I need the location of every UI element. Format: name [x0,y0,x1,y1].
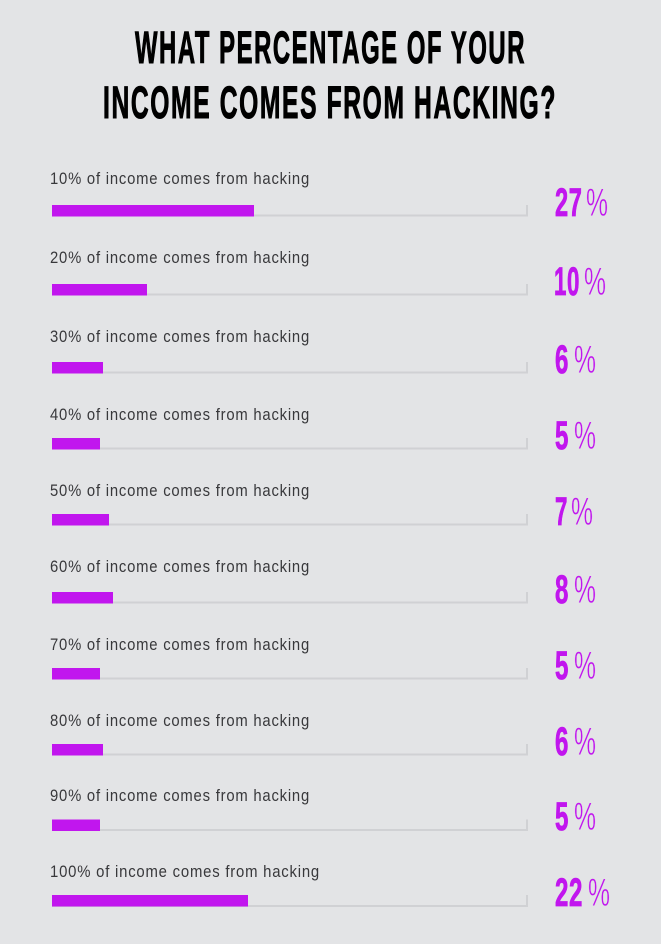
value: 6 [555,338,569,382]
value: % [571,491,593,534]
bar [52,205,528,216]
bar [52,895,528,907]
row: 80% [50,711,596,764]
value: 27 [555,181,582,225]
row: 50% [50,481,593,534]
bar [52,820,528,831]
bar [52,592,528,604]
label: 70% of income comes from hacking [50,635,310,654]
value: % [584,261,606,304]
value [555,644,596,688]
bar [52,514,528,526]
row: 100% [50,862,610,915]
value: % [574,569,596,612]
value: % [588,872,610,915]
label: 100% of income comes from hacking [50,862,320,881]
value: % [574,339,596,382]
row: 90% [50,786,596,839]
value: 5 [555,795,569,839]
row: 30% [50,327,596,382]
value: 22 [555,871,583,915]
label: 20% of income comes from hacking [50,248,310,267]
bar [52,744,528,756]
value: 8 [555,568,569,612]
value [555,490,593,534]
label: 30% of income comes from hacking [50,327,310,346]
label: 60% of income comes from hacking [50,557,310,576]
value: % [574,721,596,764]
bar [52,668,528,680]
bar [52,284,528,296]
value: 10 [554,260,580,304]
value: % [574,415,596,458]
label: 90% of income comes from hacking [50,786,310,805]
value: 6 [555,720,569,764]
value [555,568,596,612]
label: 10% of income comes from hacking [50,169,310,188]
row: 60% [50,557,596,612]
row: 70% [50,635,596,688]
row: 10% [50,169,608,225]
bar [52,438,528,450]
value: % [574,645,596,688]
label: 40% of income comes from hacking [50,405,310,424]
row: 20% [50,248,606,304]
value [555,414,596,458]
title [103,22,557,128]
value: % [574,796,596,839]
label: 80% of income comes from hacking [50,711,310,730]
value: % [586,182,608,225]
value [555,795,596,839]
value: 7 [555,490,568,534]
value [555,338,596,382]
value: 5 [555,414,569,458]
value [555,720,596,764]
value: 5 [555,644,569,688]
label: 50% of income comes from hacking [50,481,310,500]
row: 40% [50,405,596,458]
bar [52,362,528,374]
